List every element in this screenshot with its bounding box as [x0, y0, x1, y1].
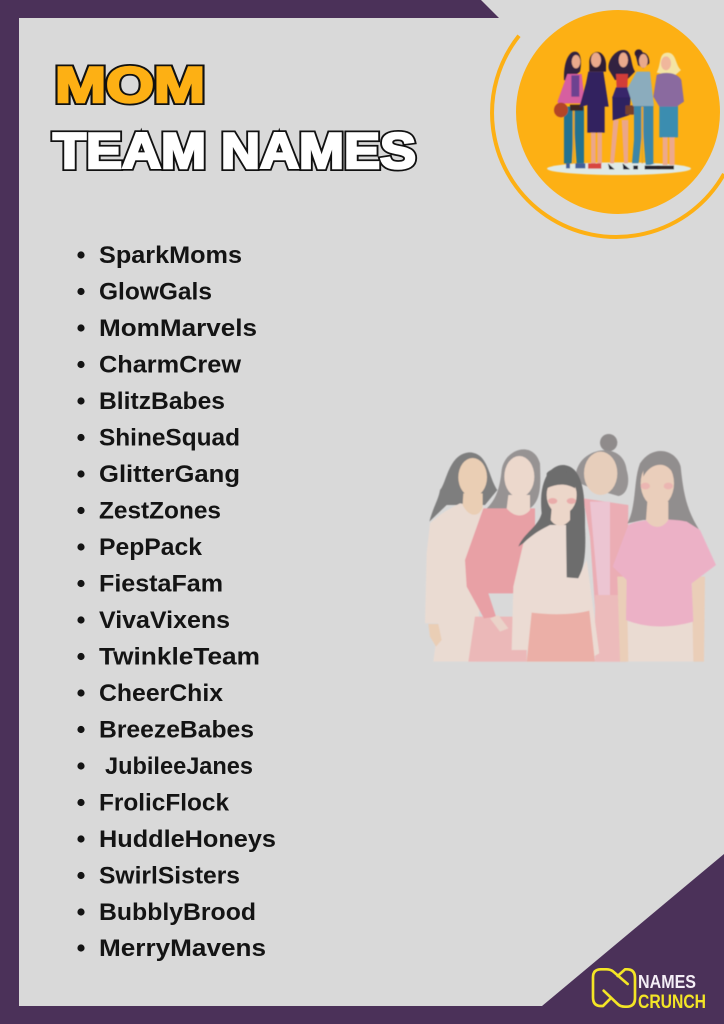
illustration: faded group of five women [425, 434, 716, 662]
woman 5 [657, 53, 681, 75]
list of team names: CharmCrew [99, 352, 242, 378]
title: MOM: MOM [55, 57, 205, 113]
list of team names: BubblyBrood [99, 899, 256, 926]
list of team names: BreezeBabes [99, 716, 254, 744]
list of team names: MerryMavens [99, 935, 266, 962]
logo text: NAMES [638, 972, 696, 992]
logo: Names Crunch: CRUNCH [638, 992, 706, 1013]
woman 4 [635, 49, 643, 57]
list of team names: FiestaFam [99, 570, 223, 598]
list of team names: PepPack [99, 534, 202, 561]
illustration: five women standing [547, 49, 691, 175]
faded woman 4 [600, 434, 617, 451]
bullets [77, 251, 85, 952]
icon: yellow circle with group of women [492, 10, 724, 237]
list of team names: HuddleHoneys [99, 826, 276, 853]
list of team names [77, 242, 276, 962]
list of team names: GlowGals [99, 278, 212, 306]
yellow ring arc [492, 36, 724, 237]
list of team names: ShineSquad [99, 424, 240, 452]
list of team names: BlitzBabes [99, 388, 225, 415]
list of team names: VivaVixens [99, 607, 230, 634]
list of team names: TwinkleTeam [99, 644, 260, 670]
list of team names: MomMarvels [99, 315, 257, 342]
list of team names: SparkMoms [99, 242, 242, 269]
title: TEAM NAMES: TEAM NAMES [53, 123, 416, 179]
faded woman 1 [429, 452, 497, 522]
list of team names: ZestZones [99, 498, 221, 524]
woman 3 [609, 50, 635, 80]
list of team names: FrolicFlock [99, 790, 229, 816]
title: MOM: MOM [55, 57, 205, 113]
list of team names: SwirlSisters [99, 862, 240, 890]
yellow disc [516, 10, 720, 214]
logo icon: N mark [593, 969, 635, 1007]
faded woman 5 [627, 451, 699, 530]
list of team names: CheerChix [99, 680, 223, 707]
woman 1 [564, 52, 581, 82]
faded woman 3 [518, 465, 585, 578]
list of team names: JubileeJanes [105, 753, 253, 780]
list of team names: GlitterGang [99, 461, 240, 488]
title: TEAM NAMES: TEAM NAMES [53, 123, 416, 179]
logo: Names Crunch [593, 969, 706, 1013]
faded woman 2 [485, 449, 540, 510]
woman 2 [589, 52, 606, 72]
